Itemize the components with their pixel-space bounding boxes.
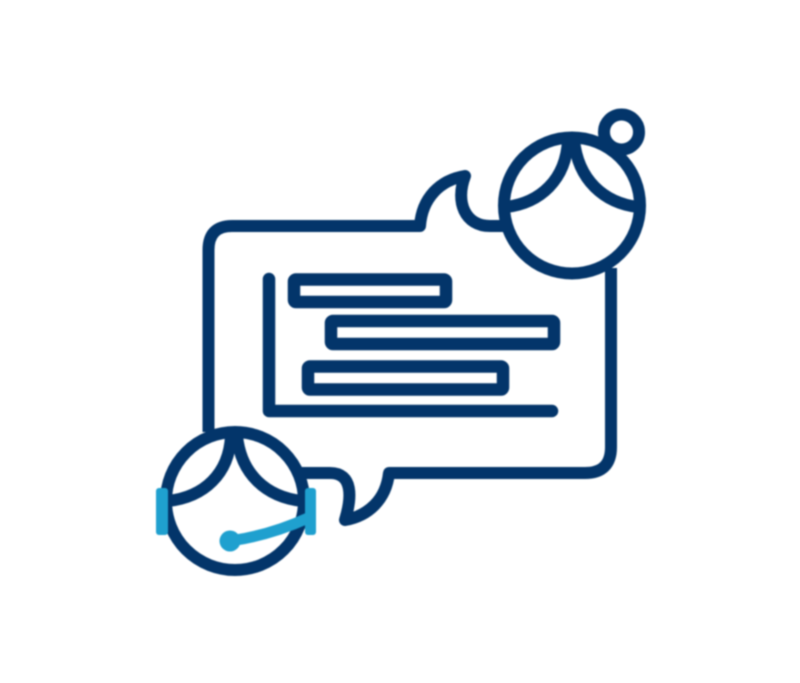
axis line	[269, 279, 552, 411]
text bar 3	[308, 366, 503, 390]
speech bubble outline	[208, 176, 611, 520]
icon: support agent head with headset	[156, 432, 316, 570]
left earpiece	[156, 488, 168, 535]
microphone boom	[230, 518, 308, 541]
text bar 2	[331, 321, 554, 344]
headset	[156, 488, 316, 552]
icon: customer head with hair bun	[504, 114, 640, 274]
text bar 1	[294, 280, 446, 302]
document lines	[269, 279, 554, 411]
right earpiece	[305, 488, 316, 535]
microphone tip	[220, 530, 240, 552]
